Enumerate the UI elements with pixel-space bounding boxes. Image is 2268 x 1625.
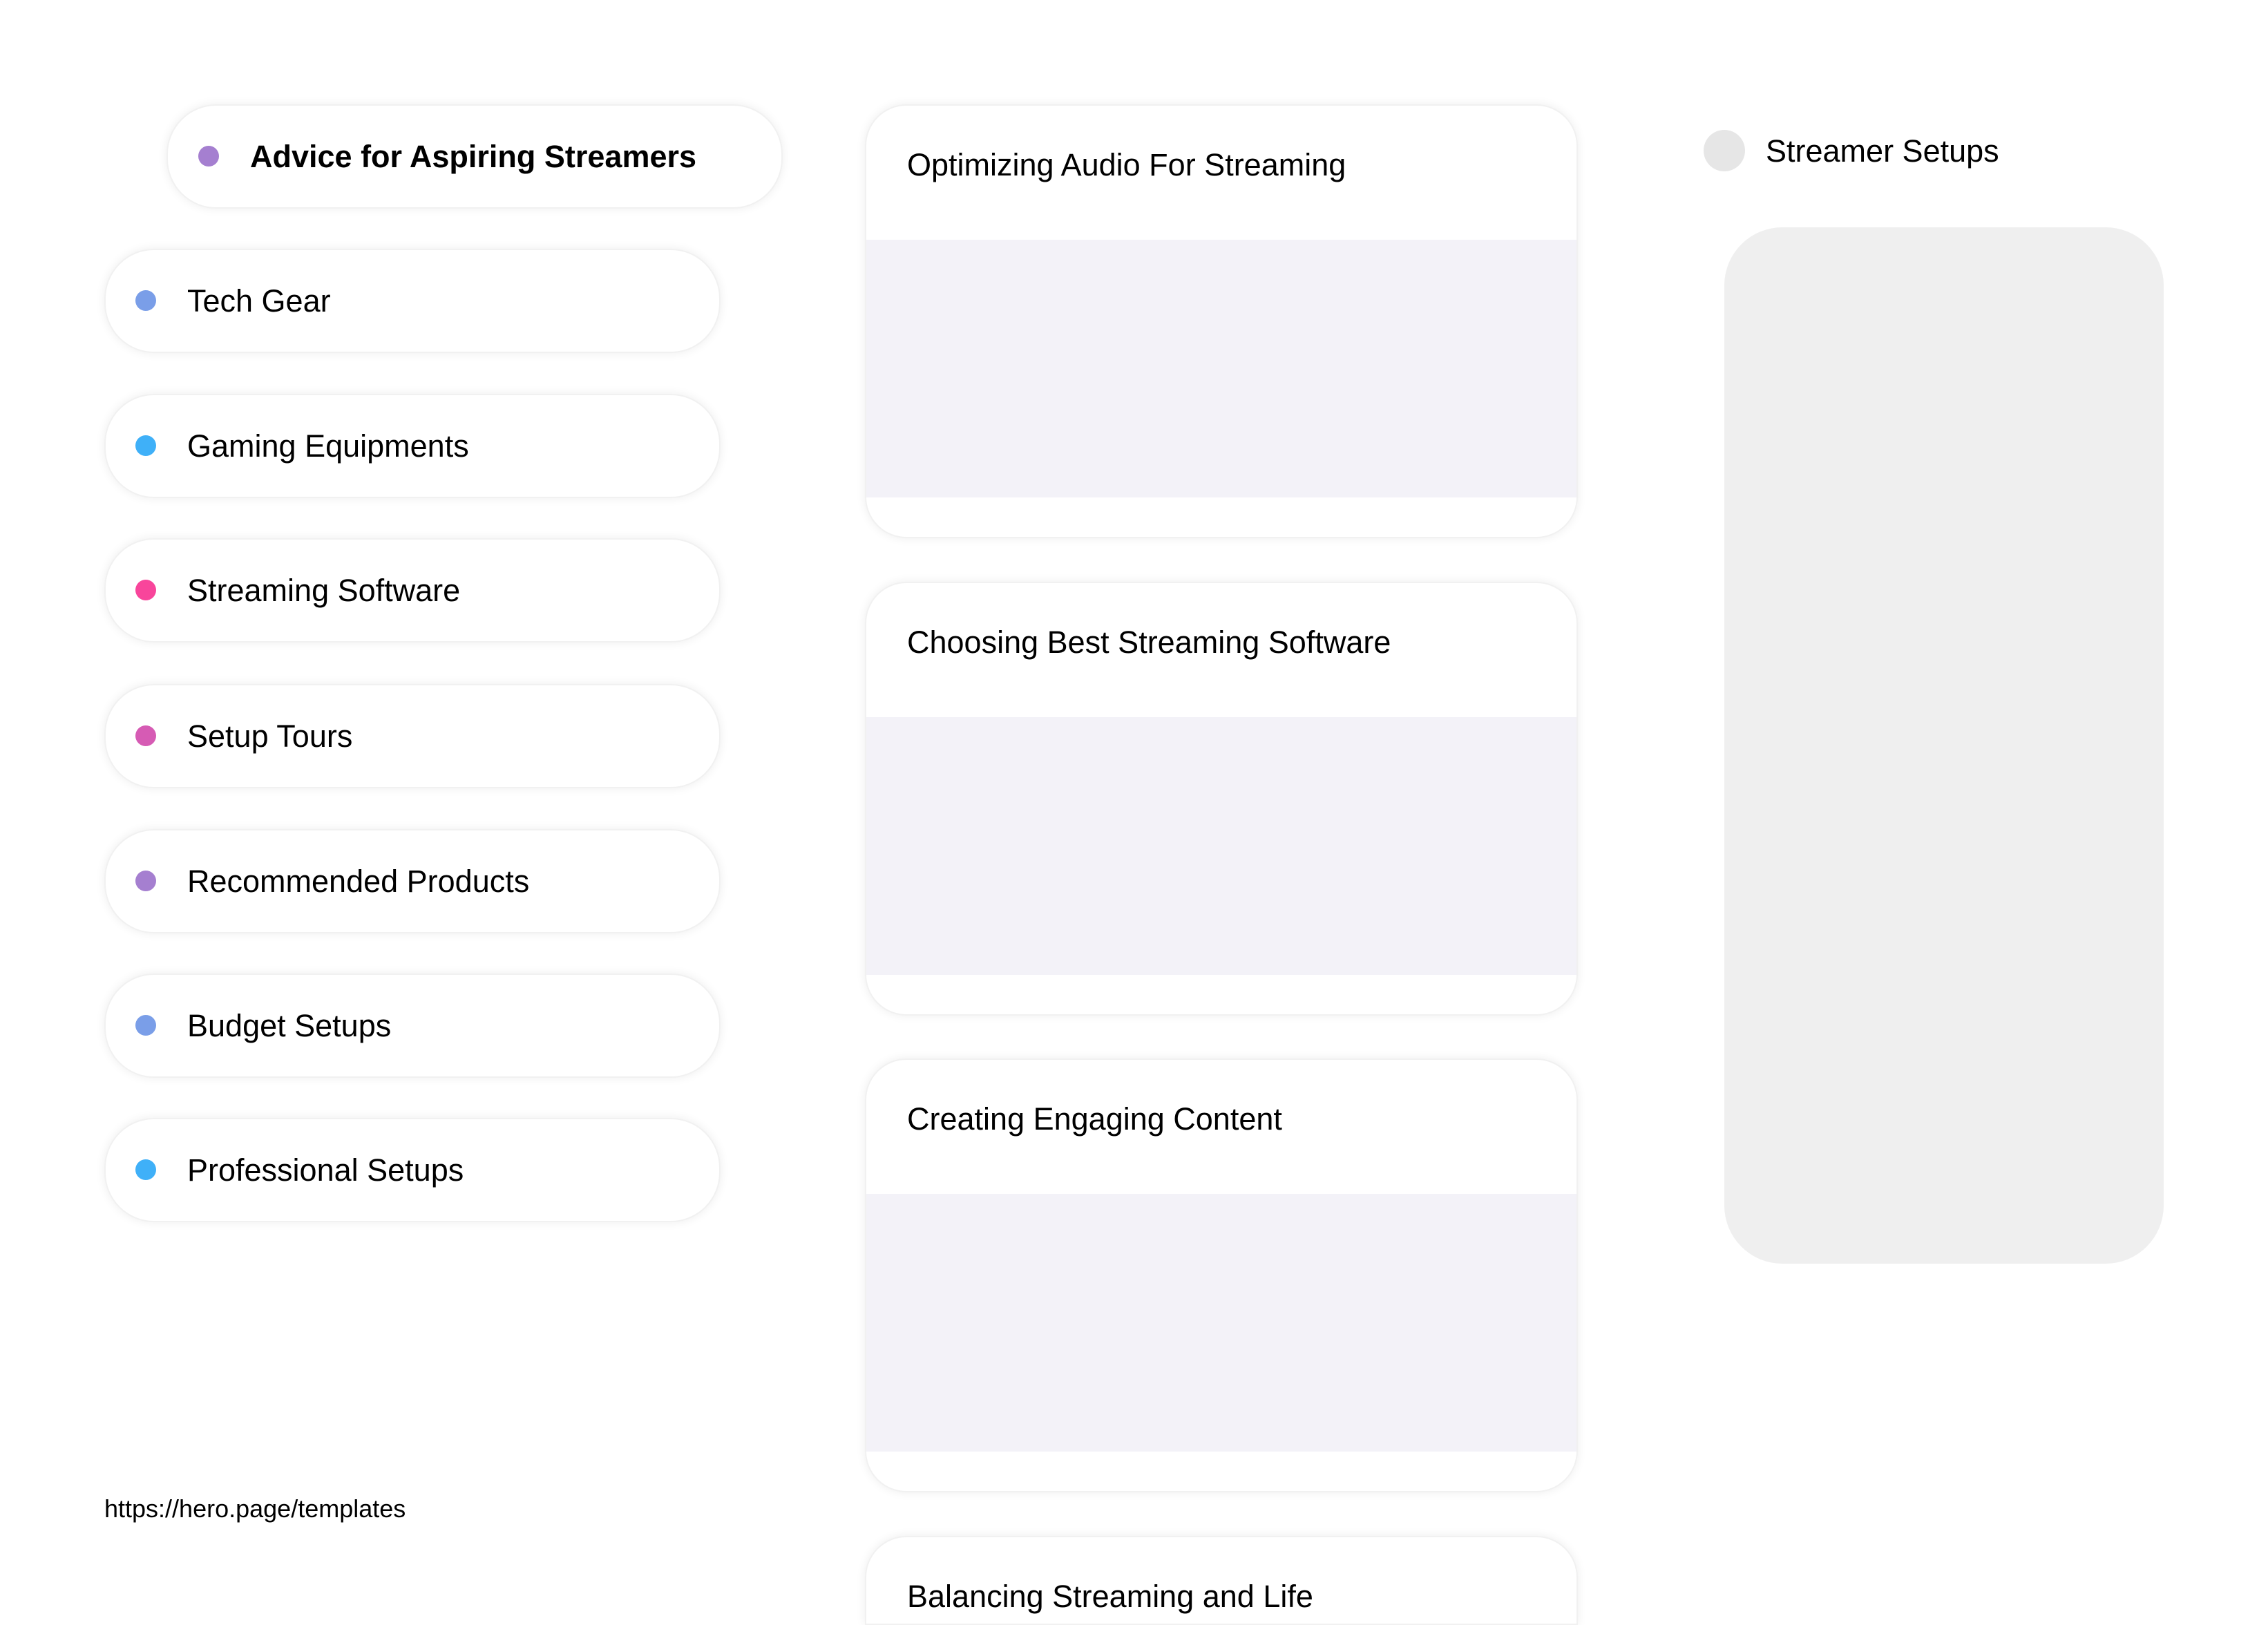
item: Gaming Equipments: Gaming Equipments (187, 428, 469, 463)
card: Optimizing Audio: Optimizing Audio For Streaming (907, 147, 1346, 182)
item: Professional Setups: Professional Setups (187, 1152, 464, 1187)
item: Professional Setups (104, 1118, 721, 1222)
footer url: https://hero.page/templates (104, 1494, 406, 1523)
item: Recommended Products: Recommended Products (187, 864, 529, 898)
right heading text: Streamer Setups (1766, 133, 1999, 169)
right gray panel (1724, 227, 2164, 1264)
card: Engaging Content: Creating Engaging Content (907, 1101, 1282, 1137)
icon: title dot (198, 146, 219, 167)
card: Engaging Content (865, 1058, 1578, 1492)
item: Gaming Equipments (104, 394, 721, 498)
item: Budget Setups: Budget Setups (187, 1007, 391, 1043)
icon: gray circle (1704, 130, 1745, 171)
item: Tech Gear: Tech Gear (187, 283, 331, 318)
card: Choosing Software: Choosing Best Streaming Software (907, 625, 1391, 660)
item: Setup Tours: Setup Tours (187, 719, 352, 753)
card: Choosing Software (865, 582, 1578, 1016)
item: Streaming Software: Streaming Software (187, 572, 460, 608)
item: Setup Tours (104, 684, 721, 788)
title text: Advice for Aspiring Streamers (250, 138, 696, 174)
right header (1704, 130, 1999, 171)
item: Streaming Software (104, 538, 721, 643)
item: Tech Gear (104, 249, 721, 353)
card: Balancing: Balancing Streaming and Life (907, 1579, 1313, 1614)
card: Balancing (865, 1536, 1578, 1625)
title pill (166, 104, 783, 209)
card: Optimizing Audio (865, 104, 1578, 538)
item: Budget Setups (104, 973, 721, 1078)
item: Recommended Products (104, 829, 721, 933)
